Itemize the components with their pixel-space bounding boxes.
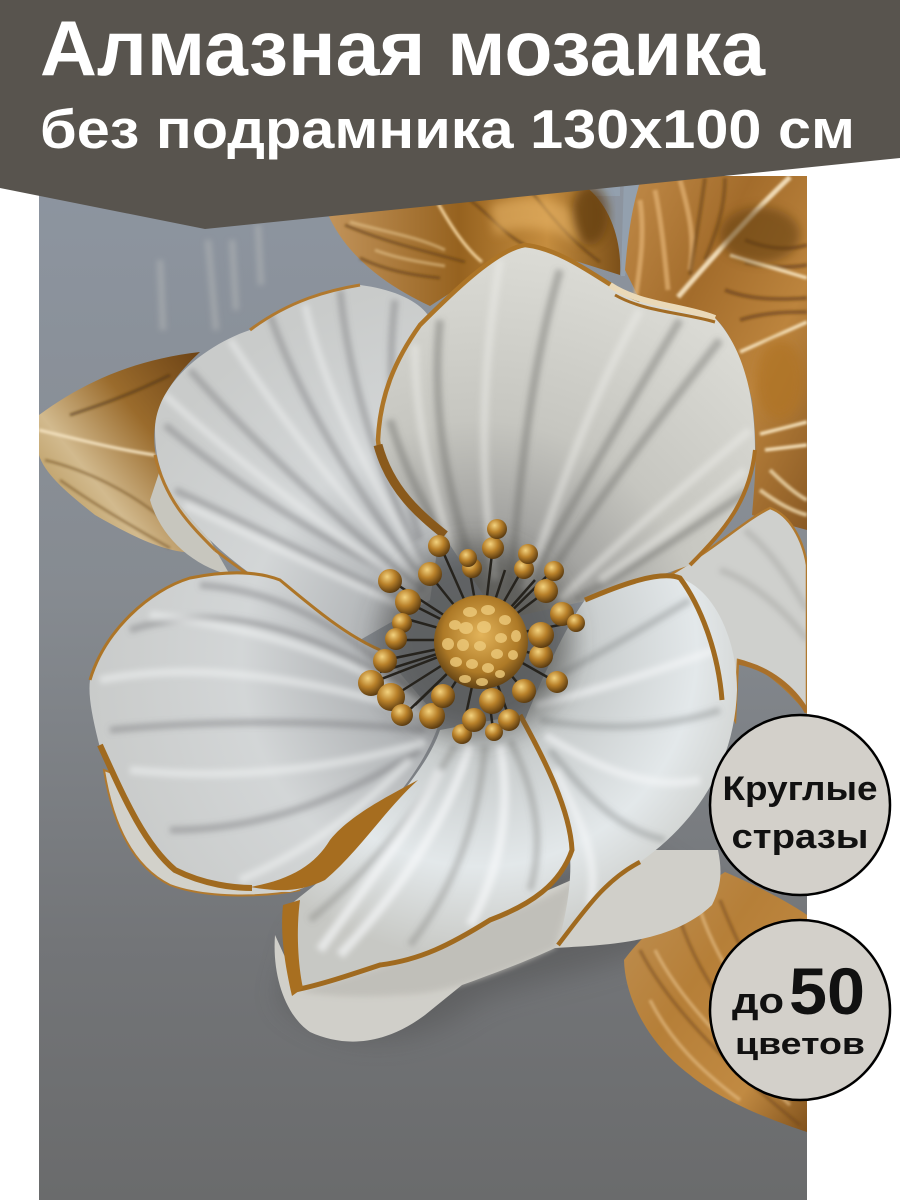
petal: top right <box>378 245 755 620</box>
stamen filaments <box>380 554 562 724</box>
gold leaf: left <box>39 352 200 552</box>
gold stamens <box>358 519 585 744</box>
badge: up to 50 colours: цветов <box>735 1026 865 1061</box>
badge: round rhinestones: Круглые <box>722 770 878 808</box>
title: Алмазная мозаика <box>40 4 766 92</box>
petal: right back <box>670 508 807 720</box>
top banner <box>0 0 900 229</box>
gold leaf: bottom right <box>624 872 807 1132</box>
petal: upper left <box>155 285 440 640</box>
gold leaf: top right <box>625 176 807 530</box>
badge: round rhinestones: стразы <box>732 818 868 856</box>
golden centre dome <box>434 595 528 689</box>
petal: far left <box>89 573 440 892</box>
subtitle: без подрамника 130х100 см <box>40 98 855 160</box>
flower cast shadow <box>282 862 642 1040</box>
gold leaf: top centre <box>327 184 620 306</box>
badge: up to 50 colours <box>710 920 890 1100</box>
petal: bottom <box>250 715 572 996</box>
painting: flower artwork <box>39 176 807 1200</box>
petal: lower back <box>104 470 720 1042</box>
badge: up to 50 colours: 50 <box>789 954 865 1028</box>
painted wall <box>39 176 807 1200</box>
badge: round rhinestones <box>710 715 890 895</box>
petal: right lower <box>525 576 737 945</box>
flower centre shadow <box>380 545 570 735</box>
badge: up to 50 colours: до <box>732 980 784 1021</box>
